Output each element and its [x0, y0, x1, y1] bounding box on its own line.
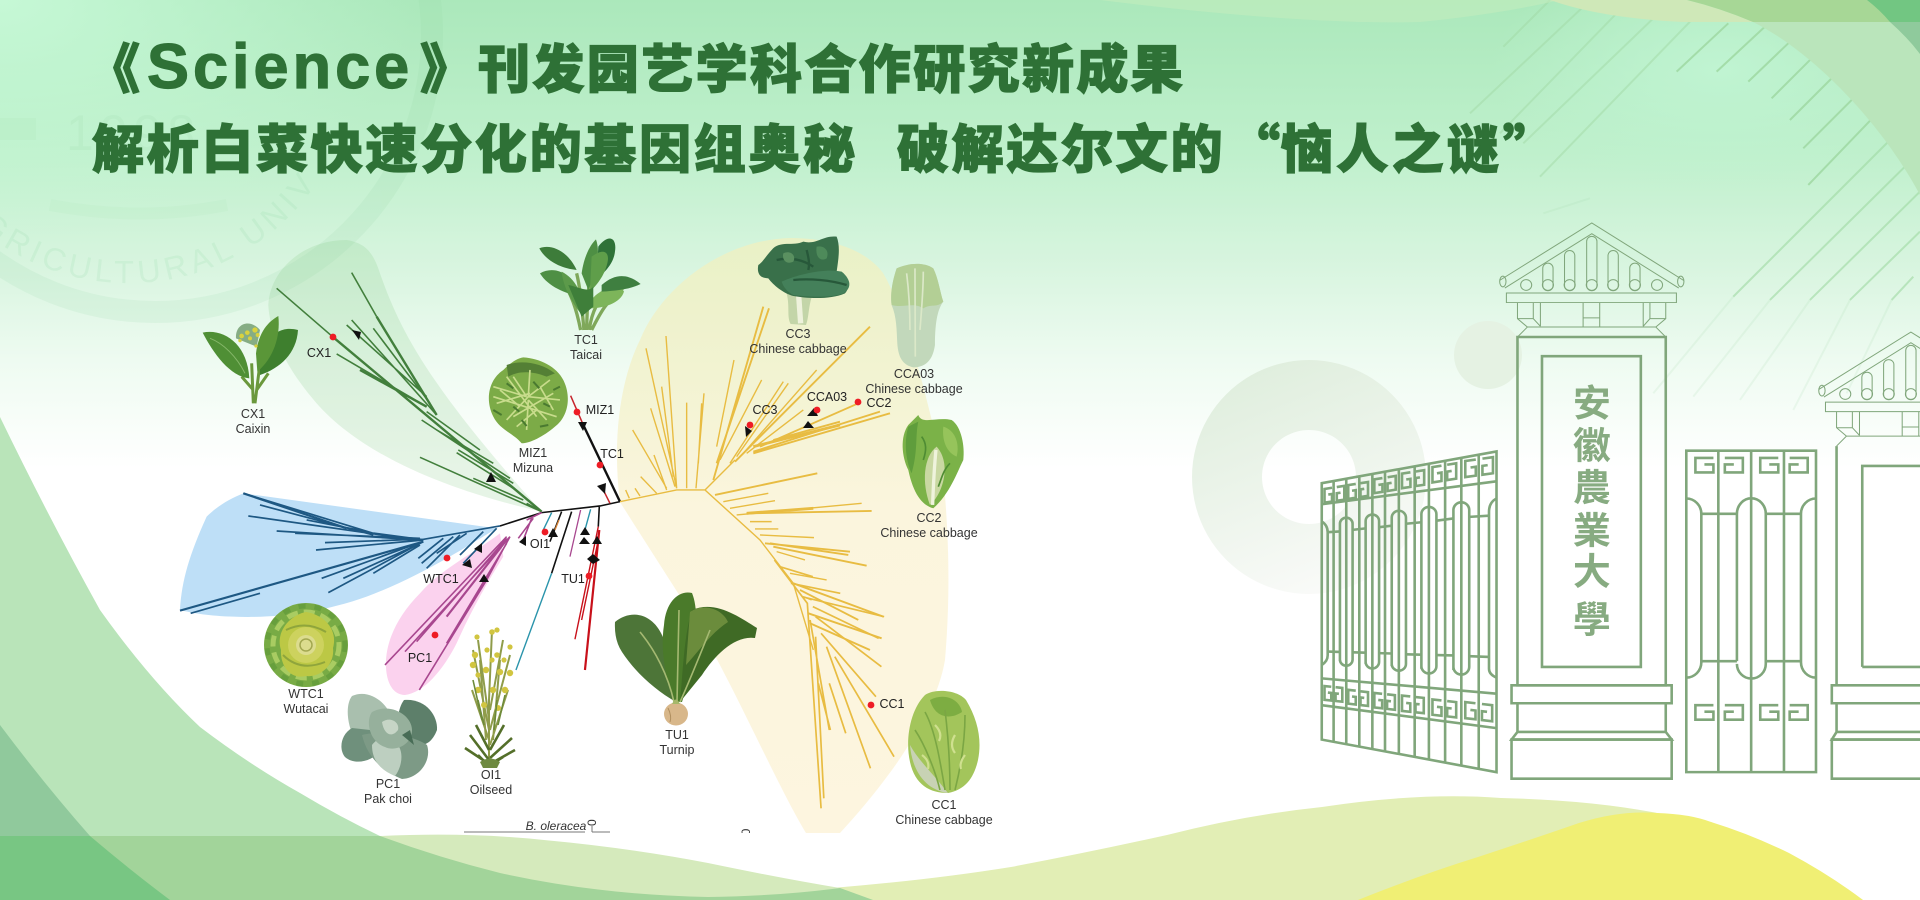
plant: WTC1 Wutacai	[264, 603, 348, 687]
university name calligraphy: 徽	[1573, 416, 1611, 469]
label: OI1 Oilseed: OI1	[481, 768, 501, 782]
branches: green clade	[277, 273, 542, 512]
branches: navy WTC clade	[180, 493, 500, 613]
university name calligraphy: 大	[1573, 542, 1611, 595]
plant: CCA03 Chinese cabbage	[865, 264, 963, 396]
branch labels: MIZ1	[586, 403, 614, 417]
plant: CC3 Chinese cabbage	[749, 236, 849, 356]
plant: CC1 Chinese cabbage	[908, 691, 980, 793]
label: PC1 Pak choi: PC1	[376, 777, 400, 791]
decorative circle: small	[1454, 321, 1522, 389]
title line 1: Science	[147, 32, 413, 102]
branch labels: CC1	[879, 697, 905, 711]
label: WTC1 Wutacai: Wutacai	[284, 702, 328, 716]
label: MIZ1 Mizuna: Mizuna	[513, 461, 553, 475]
label: CX1 Caixin: Caixin	[236, 422, 270, 436]
plant: CC2 Chinese cabbage	[880, 415, 978, 540]
branch labels: TC1	[600, 447, 624, 461]
branch labels: CC2	[866, 396, 892, 410]
label: MIZ1 Mizuna: MIZ1	[519, 446, 547, 460]
clade hull: CX green	[268, 240, 542, 512]
scale bar: B. oleracea	[526, 819, 587, 833]
branch labels: OI1	[530, 537, 550, 551]
phylogenetic tree figure	[180, 238, 948, 842]
scale bar	[464, 820, 750, 833]
university seal watermark: 1998	[66, 105, 201, 161]
orientation triangles	[352, 330, 818, 582]
title line 1: 刊发园艺学科合作研究新成果	[478, 28, 1185, 103]
title line 2: “	[1228, 108, 1280, 183]
centre side gate	[1686, 451, 1816, 772]
branch labels: CC3	[752, 403, 778, 417]
bottom pale wave	[380, 835, 873, 900]
university name calligraphy	[1573, 374, 1611, 643]
plant: PC1 Pak choi	[341, 694, 437, 779]
label: CCA03 Chinese cabbage: CCA03	[894, 367, 934, 381]
clade hull: CC yellow	[617, 238, 948, 833]
scale bar: 5	[708, 835, 722, 842]
bottom darkest corner	[0, 836, 170, 900]
university seal watermark	[0, 105, 389, 323]
label: CC1 Chinese cabbage: CC1	[931, 798, 957, 812]
right pillar	[1819, 332, 1920, 779]
plant: TC1 Taicai	[539, 239, 641, 362]
label: TU1 Turnip: Turnip	[660, 743, 695, 757]
label: TC1 Taicai: Taicai	[570, 348, 602, 362]
title line 1: 《	[86, 25, 140, 104]
title	[86, 25, 1555, 183]
clade hull: WTC blue	[180, 493, 497, 617]
branches: red TU clade	[575, 527, 599, 670]
title line 2: 解析白菜快速分化的基因组奥秘	[92, 108, 858, 183]
plant: MIZ1 Mizuna	[489, 357, 568, 475]
bottom left dark swoosh	[0, 725, 90, 836]
title line 1: 》	[420, 25, 474, 104]
scale bar: 0	[585, 819, 599, 826]
bottom yellow wave	[1358, 812, 1863, 900]
university gate line art	[1322, 223, 1920, 779]
top right corner curves	[1100, 0, 1920, 195]
label: CC3 Chinese cabbage: CC3	[785, 327, 811, 341]
main pillar	[1500, 223, 1684, 779]
left swung gate	[1322, 451, 1497, 772]
branch labels: TU1	[561, 572, 585, 586]
branches: magenta PC clade	[385, 513, 542, 690]
branches: central black stems	[500, 396, 620, 670]
label: WTC1 Wutacai: WTC1	[288, 687, 324, 701]
bottom lime wave	[832, 796, 1863, 900]
university name calligraphy: 安	[1573, 374, 1611, 427]
title line 2: 破解达尔文的	[897, 108, 1225, 183]
bottom green band	[0, 836, 873, 900]
university name calligraphy: 農	[1573, 458, 1611, 511]
label: TU1 Turnip: TU1	[665, 728, 689, 742]
label: CC1 Chinese cabbage: Chinese cabbage	[895, 813, 993, 827]
label: PC1 Pak choi: Pak choi	[364, 792, 412, 806]
branch labels: WTC1	[423, 572, 459, 586]
decorative circle: donut	[1192, 360, 1426, 594]
branch labels	[307, 346, 905, 711]
label: CC3 Chinese cabbage: Chinese cabbage	[749, 342, 847, 356]
university name calligraphy: 學	[1573, 590, 1611, 643]
branch labels: CX1	[307, 346, 331, 360]
bottom left large swoosh	[0, 417, 380, 900]
branch labels: CCA03	[807, 390, 847, 404]
title line 2: 恼人之谜	[1281, 108, 1502, 183]
plant: CX1 Caixin	[203, 316, 298, 436]
plant: TU1 Turnip	[615, 592, 757, 726]
branches: yellow CC clade	[620, 307, 894, 808]
university name calligraphy: 業	[1573, 501, 1611, 554]
label: CCA03 Chinese cabbage: Chinese cabbage	[865, 382, 963, 396]
sample red dots	[330, 334, 874, 708]
title line 2: ”	[1503, 108, 1555, 183]
label: CC2 Chinese cabbage: CC2	[916, 511, 942, 525]
label: CX1 Caixin: CX1	[241, 407, 265, 421]
scale bar: 40	[739, 828, 753, 842]
label: TC1 Taicai: TC1	[574, 333, 598, 347]
diagonal streak pattern	[1470, 0, 1920, 410]
branch labels: PC1	[408, 651, 432, 665]
label: OI1 Oilseed: Oilseed	[470, 783, 512, 797]
plant: OI1 Oilseed	[465, 627, 515, 768]
label: CC2 Chinese cabbage: Chinese cabbage	[880, 526, 978, 540]
clade hull: PC pink	[386, 533, 503, 695]
